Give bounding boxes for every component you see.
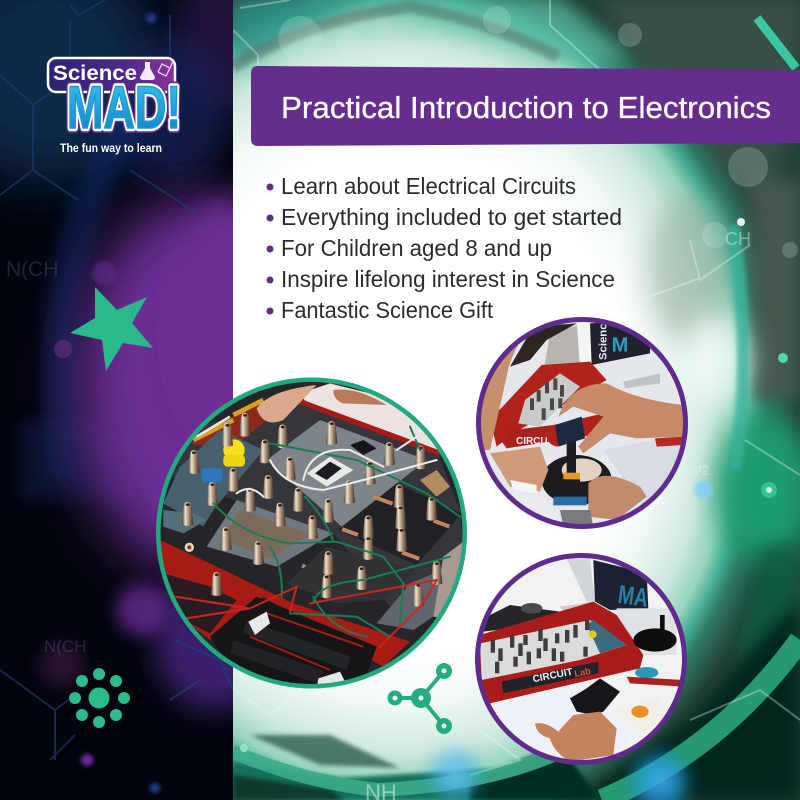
logo: Science Mad: MAD!: [67, 74, 181, 141]
bullet list: Fantastic Science Gift: [281, 297, 494, 323]
photo: child with circuit lab kit: [475, 553, 687, 765]
icon: dots: [69, 668, 130, 728]
background: left dark strip: N(CH: [6, 258, 58, 281]
title: Practical Introduction to Electronics: [281, 90, 771, 125]
background: right radial panel: 3/2: [690, 462, 710, 478]
photo: child using circuit lab: [476, 317, 688, 529]
photo: child using circuit lab: M: [612, 335, 628, 357]
photo: child with circuit lab kit: CIRCUIT: [532, 667, 574, 685]
logo: Science Mad: [48, 58, 181, 155]
photo: child with circuit lab kit: MA: [616, 579, 650, 613]
bullet list: For Children aged 8 and up: [281, 235, 552, 261]
background: right radial panel: [233, 0, 800, 800]
logo: Science Mad: Science: [53, 62, 137, 85]
bullet list: Inspire lifelong interest in Science: [281, 266, 615, 292]
photo: child using circuit lab: Science: [598, 317, 610, 360]
background: left dark strip: N(CH: [44, 637, 86, 656]
logo: Science Mad: MAD!: [67, 74, 181, 141]
background: right radial panel: CH: [725, 229, 751, 249]
bullet list: [266, 173, 622, 323]
photo: circuit board close-up: [150, 370, 470, 690]
background: left dark strip: [0, 0, 233, 800]
bullet list: Everything included to get started: [281, 204, 622, 230]
bullet list: Learn about Electrical Circuits: [281, 173, 576, 199]
logo: Science Mad: MAD!: [67, 74, 181, 141]
title banner: [251, 66, 800, 146]
icon: star: [70, 287, 153, 371]
icon: molecule: [388, 663, 452, 734]
photo: child using circuit lab: CIRCU: [516, 436, 548, 447]
logo: Science Mad: The fun way to learn: [60, 141, 162, 155]
photo: child with circuit lab kit: Lab: [573, 666, 592, 679]
